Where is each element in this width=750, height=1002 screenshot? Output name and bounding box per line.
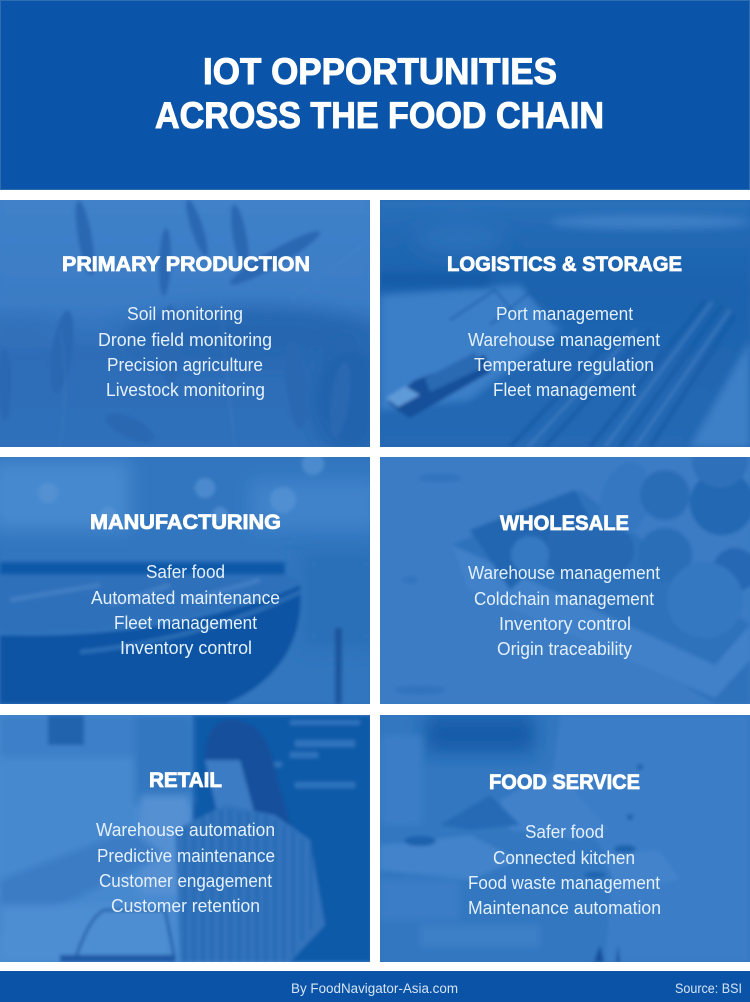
footer bar [0,971,750,1002]
title: ACROSS THE FOOD CHAIN [155,95,604,136]
title [155,51,604,136]
list [98,304,272,400]
tomatoes [592,457,658,543]
list: Drone field monitoring [98,330,272,350]
heading: RETAIL [149,769,222,792]
list [468,304,660,400]
source: Source: BSI [675,981,742,996]
list: Port management [496,304,633,324]
list [468,563,660,659]
list: Inventory control [120,638,252,658]
panel: wholesale [380,432,750,704]
panel: manufacturing [0,453,380,704]
list: Inventory control [499,614,631,634]
list [96,820,275,916]
list: Safer food [525,822,604,842]
photo: wheat field [0,198,390,455]
list: Warehouse management [468,563,660,583]
list: Fleet management [114,613,257,633]
header banner [0,0,750,190]
list: Fleet management [493,380,636,400]
list: Warehouse automation [96,820,275,840]
list: Connected kitchen [493,848,635,868]
photo: chef plating [380,715,750,962]
list: Food waste management [468,873,660,893]
title: IOT OPPORTUNITIES [203,51,557,92]
photo: woman shopping [0,715,372,962]
panel: primary production [0,198,390,455]
list [91,562,280,658]
photo: container port [380,200,750,447]
list: Coldchain management [474,589,654,609]
list: Precision agriculture [107,355,263,375]
list: Customer retention [111,896,260,916]
list: Soil monitoring [127,304,243,324]
list: Safer food [146,562,225,582]
photo: crate of tomatoes [380,432,750,704]
credit: By FoodNavigator-Asia.com [291,981,458,996]
list: Warehouse management [468,330,660,350]
list: Maintenance automation [468,898,661,918]
list: Origin traceability [497,639,632,659]
container ship [388,355,490,418]
list: Automated maintenance [91,588,280,608]
heading: MANUFACTURING [90,511,281,534]
woman [205,720,292,830]
list [468,822,661,918]
heading: FOOD SERVICE [489,771,640,794]
basket [75,910,175,960]
list: Temperature regulation [474,355,654,375]
heading: LOGISTICS & STORAGE [447,253,682,276]
photo: production line [0,453,380,704]
heading: WHOLESALE [500,512,629,535]
shelves [262,720,360,788]
panel: food service [380,715,750,962]
list: Customer engagement [99,871,272,891]
crate [452,490,750,704]
heading: PRIMARY PRODUCTION [62,253,310,276]
list: Predictive maintenance [97,846,275,866]
list: Livestock monitoring [106,380,265,400]
panel: logistics and storage [380,200,750,447]
panel: retail [0,715,372,962]
conveyor and bottles [0,585,301,704]
